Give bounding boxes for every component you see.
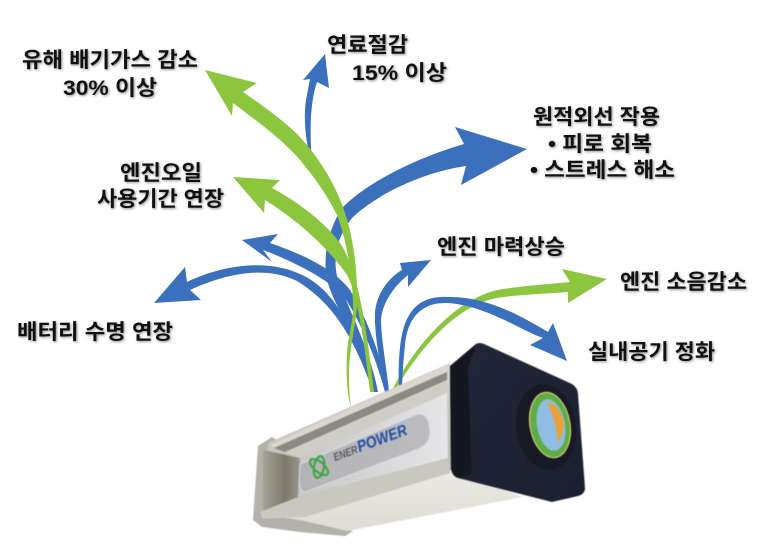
device bottom rail [260,458,450,519]
badge [510,380,582,474]
label: oil life [97,162,224,211]
arrow: oil life [233,177,374,392]
label: oil life: 사용기간 연장 [97,188,224,211]
arrow: exhaust reduction [205,70,357,407]
device interior [263,450,300,512]
label: indoor air: 실내공기 정화 [588,341,715,364]
device top rail [270,365,447,448]
device face [298,393,448,497]
label: ultraviolet action: • 피로 회복 [548,133,652,156]
label: oil life: 엔진오일 [120,162,202,185]
device body [262,363,452,515]
label: ultraviolet action [530,106,675,182]
device label plate [299,414,430,492]
arrow: fuel saving [303,54,329,163]
label: battery life: 배터리 수명 연장 [17,321,173,344]
label: ultraviolet action: 원적외선 작용 [533,106,660,129]
device: air purifier [253,343,585,536]
device lower skirt [262,470,523,531]
label: engine power: 엔진 마력상승 [437,236,565,259]
label: ultraviolet action: • 스트레스 해소 [530,159,675,182]
label: exhaust reduction: 유해 배기가스 감소 [22,49,198,72]
logo: wordmark: ENER [332,444,360,464]
arrow: indoor air [399,297,567,392]
label: fuel saving: 연료절감 [327,34,408,57]
label: fuel saving [327,34,447,85]
arrow: battery life [154,265,377,392]
logo: atom icon [306,452,332,482]
label: fuel saving: 15% 이상 [352,62,447,85]
label: exhaust reduction: 30% 이상 [63,77,157,100]
device end plate [253,437,353,536]
logo: wordmark [331,422,410,465]
device black cap [450,343,585,502]
arrow: noise reduction [391,269,607,392]
label: noise reduction: 엔진 소음감소 [620,271,747,294]
arrow: third blue branch [242,234,389,392]
logo: wordmark: POWER [355,422,410,456]
arrow: ultraviolet action [325,127,527,392]
label: exhaust reduction [22,49,198,100]
arrow: engine power [375,260,431,392]
